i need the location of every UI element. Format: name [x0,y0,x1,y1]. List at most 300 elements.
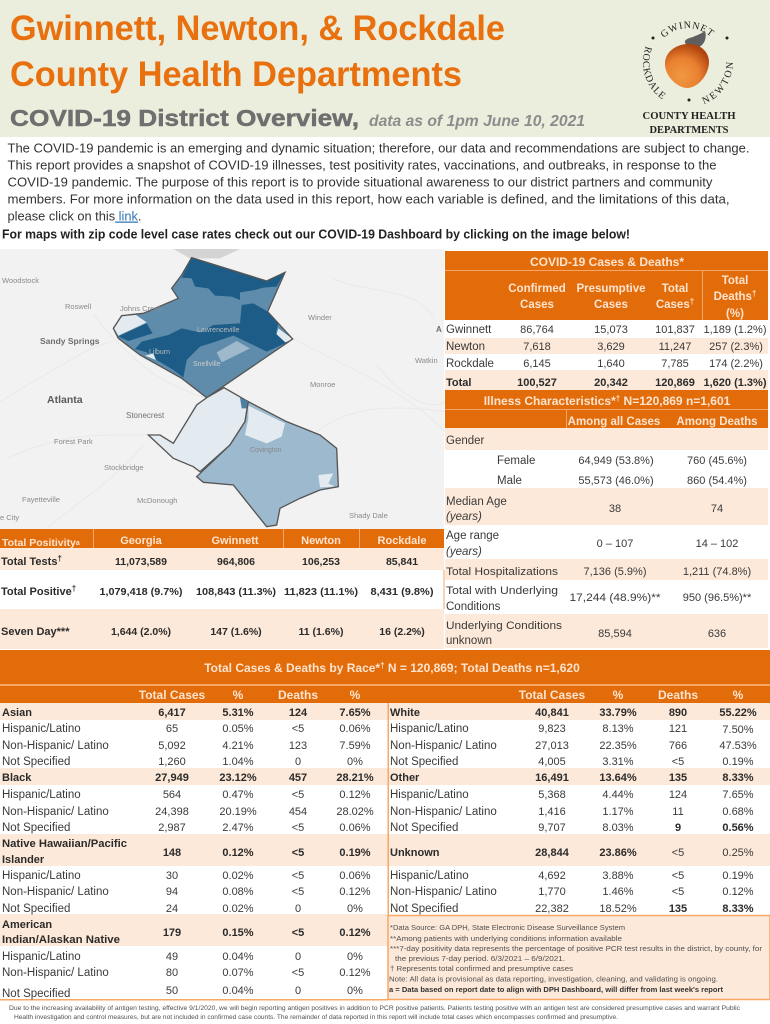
row: hospitalizations: 1,211 (74.8%) [683,566,751,578]
Native Hawaiian/Pacific Islander rows: <5 [292,847,304,859]
Black rows: Non-Hispanic/ Latino [2,806,109,818]
Black rows: Not Specified [2,822,70,834]
Unknown rows: 4,692 [538,870,566,882]
American Indian/Alaskan Native rows: Hispanic/Latino [2,951,81,963]
Native Hawaiian/Pacific Islander rows: Non-Hispanic/ Latino [2,886,109,898]
row: age range: (years) [446,546,482,558]
Other rows: Other [390,772,420,784]
introduction text [8,142,750,224]
Other rows: 0.68% [722,806,754,818]
Native Hawaiian/Pacific Islander rows: 94 [166,886,178,898]
row: seven day: 147 (1.6%) [210,626,262,638]
row: county total: 20,342 [594,377,628,389]
Black rows: Hispanic/Latino [2,789,81,801]
row: total positive: 1,079,418 (9.7%) [100,587,182,598]
row: seven day: 1,644 (2.0%) [111,626,171,638]
map place labels: A [436,325,442,334]
Newton county choropleth [197,398,338,527]
Unknown rows: 3.88% [602,870,634,882]
Other rows: 9,707 [538,822,566,834]
American Indian/Alaskan Native rows: 0 [295,985,301,997]
footer note: Due to the increasing availability of antigen testing, effective 9/1/2020, we will begin reporting antigen positives in addition to PCR positive patients. Patients testing positive with an antigen test are considered presumptive cases and warrant Public [9,1005,741,1012]
map place labels: Winder [308,313,332,322]
American Indian/Alaskan Native rows: Not Specified [2,988,70,1000]
table: illness characteristics [445,390,768,648]
section banner: cases and deaths by race [0,650,770,686]
row: Gwinnett: Gwinnett [446,324,492,336]
Black rows: 0.47% [222,789,254,801]
county column headers: Deaths [714,291,752,303]
White rows: Hispanic/Latino [390,723,469,735]
icon: county health logo [642,22,736,136]
row: conditions unknown: Underlying Conditions [446,620,563,632]
panel: footnotes: **Among patients with underlying conditions information available [390,934,622,943]
row: county total: 1,620 (1.3%) [704,377,767,389]
left column headers: Total Cases [139,688,206,702]
right column headers: Total Cases [519,688,586,702]
Black rows [2,772,374,834]
Unknown rows: 18.52% [599,903,637,915]
introduction text: please click on this link. [8,210,142,224]
row: seven day: Seven Day*** [1,626,70,638]
Other rows [390,772,754,834]
Native Hawaiian/Pacific Islander rows: Islander [2,854,45,866]
Other rows: 16,491 [535,772,569,784]
Unknown rows: Unknown [390,847,440,859]
row: county total: Total [446,377,471,389]
county column headers: Cases [520,299,554,311]
row: seven day [1,626,425,638]
Native Hawaiian/Pacific Islander rows: 30 [166,870,178,882]
Black rows: 2,987 [158,822,186,834]
Asian rows: 0.05% [222,723,254,735]
Unknown rows: <5 [672,847,684,859]
White rows: 3.31% [602,756,634,768]
American Indian/Alaskan Native rows: 0 [295,951,301,963]
row: age range: 14 – 102 [696,538,738,550]
Asian rows: 1,260 [158,756,186,768]
Unknown rows: 0.12% [722,886,754,898]
American Indian/Alaskan Native rows: 0% [347,951,363,963]
row: total positive: 11,823 (11.1%) [284,587,358,598]
Other rows: 4.44% [602,789,634,801]
row: total tests: 964,806 [217,556,255,568]
White rows: 0.19% [722,756,754,768]
illness column headers [568,416,758,428]
table: race breakdown, right [388,686,770,1000]
Other rows: Hispanic/Latino [390,789,469,801]
Unknown rows: 8.33% [722,903,754,915]
Native Hawaiian/Pacific Islander rows: 0.12% [222,847,254,859]
White rows: 7.50% [722,724,754,736]
American Indian/Alaskan Native rows: Indian/Alaskan Native [2,934,120,946]
row: gender: Gender [446,435,485,447]
row: total tests: Total Tests [1,556,57,568]
Unknown rows: <5 [672,886,684,898]
Unknown rows: 1.46% [602,886,634,898]
row: male [497,475,747,487]
row: Newton: 3,629 [597,341,625,353]
row: male: 55,573 (46.0%) [578,475,654,487]
American Indian/Alaskan Native rows [2,919,371,1000]
section banner: cases and deaths by race: N = 120,869; Total Deaths n=1,620 [385,661,580,675]
Unknown rows: 0.25% [722,847,754,859]
Native Hawaiian/Pacific Islander rows: <5 [292,870,304,882]
county column headers: † [752,289,756,298]
section banner: cases and deaths by race: † [380,661,385,670]
Unknown rows: 1,770 [538,886,566,898]
row: median age [446,496,723,523]
American Indian/Alaskan Native rows: 49 [166,951,178,963]
table: total positivity [0,529,444,649]
map place labels: Monroe [310,380,335,389]
row: total positive: † [72,584,76,593]
Black rows: 28.02% [336,806,374,818]
map place labels [0,276,442,522]
county column headers [508,275,756,320]
row: female: 760 (45.6%) [687,455,747,467]
map place labels: Forest Park [54,437,93,446]
row: hospitalizations: 7,136 (5.9%) [584,566,646,578]
Other rows: 124 [669,789,687,801]
data date: data as of 1pm June 10, 2021 [369,113,585,130]
row: median age: 74 [711,503,723,515]
row: underlying conditions: Total with Underlying [446,585,558,597]
Unknown rows [390,847,754,915]
White rows: <5 [672,756,684,768]
Unknown rows: Hispanic/Latino [390,870,469,882]
introduction text: members. For more information on the data used in this report, how each variable is defined, and the limitations of this data, [8,192,730,206]
Black rows: <5 [292,822,304,834]
American Indian/Alaskan Native rows: 179 [163,927,181,939]
Native Hawaiian/Pacific Islander rows: Hispanic/Latino [2,870,81,882]
row: county total: 100,527 [517,377,557,389]
map place labels: Lawrenceville [197,327,240,334]
row: total tests: 106,253 [302,556,340,568]
left column headers: % [350,688,361,702]
Asian rows: 123 [289,740,307,752]
right column headers [519,688,744,702]
White rows: 22.35% [599,740,637,752]
row: total positive: Total Positive [1,586,72,598]
table: race breakdown, left [0,686,388,1000]
Asian rows: 1.04% [222,756,254,768]
White rows: 9,823 [538,723,566,735]
map place labels: Fayetteville [22,495,60,504]
row: underlying conditions: 17,244 (48.9%)** [570,592,661,604]
row: Newton: 11,247 [659,341,691,353]
Native Hawaiian/Pacific Islander rows: <5 [292,886,304,898]
Other rows: 1.17% [602,806,634,818]
left column headers: % [233,688,244,702]
row: male: Male [497,475,522,487]
Native Hawaiian/Pacific Islander rows: 0.08% [222,886,254,898]
panel: footnotes: † Represents total confirmed and presumptive cases [390,964,573,973]
row: median age: 38 [609,503,621,515]
Native Hawaiian/Pacific Islander rows [2,838,371,915]
row: Gwinnett: 86,764 [520,324,554,336]
row: total tests: † [57,554,62,563]
Unknown rows: <5 [672,870,684,882]
White rows: 33.79% [599,707,637,719]
map place labels: Atlanta [47,394,83,406]
Other rows: 9 [675,822,681,834]
row: Rockdale: 7,785 [661,358,689,370]
row: total tests: 11,073,589 [115,556,167,568]
map place labels: McDonough [137,496,177,505]
row: Newton: Newton [446,341,485,353]
county column headers: Presumptive [576,283,646,295]
row: female: 64,949 (53.8%) [578,455,654,467]
county column headers: Confirmed [508,283,566,295]
Black rows: 20.19% [219,806,257,818]
icon: county health logo: DEPARTMENTS [650,125,729,136]
row: Newton: 257 (2.3%) [709,341,763,353]
Unknown rows: Not Specified [390,903,458,915]
American Indian/Alaskan Native rows: 50 [166,985,178,997]
Black rows: 454 [289,806,307,818]
Other rows: Not Specified [390,822,458,834]
icon: county health logo: ROCKDALE [642,46,666,100]
row: seven day: 16 (2.2%) [379,626,425,638]
Rockdale county choropleth [148,388,248,472]
dashboard prompt: For maps with zip code level case rates check out our COVID-19 Dashboard by clicking on the image below! [2,228,630,242]
White rows: Non-Hispanic/ Latino [390,740,497,752]
White rows: 121 [669,723,687,735]
panel: footnotes: *Data Source: GA DPH, State Electronic Disease Surveillance System [390,923,625,932]
Asian rows: 65 [166,723,178,735]
county column headers: Total [722,275,748,287]
American Indian/Alaskan Native rows: 0.07% [222,967,254,979]
American Indian/Alaskan Native rows: American [2,919,52,931]
White rows: 4,005 [538,756,566,768]
Native Hawaiian/Pacific Islander rows: 0.12% [339,886,371,898]
county column headers: Cases [594,299,628,311]
Asian rows: 7.59% [339,740,371,752]
introduction text: This report provides a snapshot of COVID-19 illnesses, test positivity rates, vaccinations, and outbreaks, in response to the [8,158,717,172]
Asian rows: Hispanic/Latino [2,723,81,735]
White rows: 27,013 [535,740,569,752]
map: district case rates [0,249,445,529]
American Indian/Alaskan Native rows: 0.15% [222,927,254,939]
row: county total [446,377,767,389]
right column headers: % [613,688,624,702]
Asian rows: 4.21% [222,740,254,752]
Asian rows: 0% [347,756,363,768]
Black rows: 23.12% [219,772,257,784]
row: underlying conditions: 950 (96.5%)** [683,592,752,604]
positivity header row [2,535,426,549]
row: Rockdale: 6,145 [523,358,551,370]
Native Hawaiian/Pacific Islander rows: 0 [295,903,301,915]
Asian rows: 0 [295,756,301,768]
Asian rows: Asian [2,707,32,719]
positivity header row: Georgia [120,535,163,547]
American Indian/Alaskan Native rows: 0.04% [222,951,254,963]
row: Gwinnett: 101,837 [655,324,695,336]
row: Gwinnett: 1,189 (1.2%) [704,324,766,336]
Asian rows: 0.06% [339,723,371,735]
White rows: 890 [669,707,687,719]
footer note [9,1005,741,1021]
Native Hawaiian/Pacific Islander rows: Native Hawaiian/Pacific [2,838,127,850]
right column headers: Deaths [658,688,698,702]
county table heading: COVID-19 Cases & Deaths* [530,255,684,269]
illness heading: † [616,394,620,403]
row: underlying conditions: Conditions [446,601,501,613]
Asian rows [2,707,371,768]
Other rows: 1,416 [538,806,566,818]
illness heading: N=120,869 n=1,601 [620,394,731,408]
row: age range: Age range [446,530,499,542]
row: Rockdale: 1,640 [597,358,625,370]
map place labels: Lilburn [149,349,170,356]
title: County Health Departments [10,55,462,94]
title: Gwinnett, Newton, & Rockdale [10,9,505,48]
Unknown rows: 22,382 [535,903,569,915]
row: Gwinnett [446,324,766,336]
row: conditions unknown [446,620,726,647]
White rows: Not Specified [390,756,458,768]
White rows: 766 [669,740,687,752]
Other rows: 0.56% [722,822,754,834]
row: age range [446,530,738,558]
county column headers: † [690,297,694,306]
map place labels: Shady Dale [349,511,388,520]
county column headers: Total [662,283,688,295]
Other rows: 7.65% [722,789,754,801]
Other rows: 5,368 [538,789,566,801]
American Indian/Alaskan Native rows: <5 [292,927,304,939]
row: hospitalizations: Total Hospitalizations [446,566,559,578]
Native Hawaiian/Pacific Islander rows: 0.02% [222,903,254,915]
row: conditions unknown: unknown [446,635,492,647]
left column headers [139,688,361,702]
Black rows: 24,398 [155,806,189,818]
Asian rows: <5 [292,723,304,735]
row: median age: Median Age [446,496,507,508]
Unknown rows: 23.86% [599,847,637,859]
American Indian/Alaskan Native rows: 0.12% [339,967,371,979]
row: Rockdale: Rockdale [446,358,494,370]
Other rows: 8.03% [602,822,634,834]
panel: footnotes: ***7-day positivity data represents the percentage of positive PCR test results in the district, by county, for [390,944,762,953]
positivity header row: Gwinnett [211,535,259,547]
row: total positive: 8,431 (9.8%) [370,587,434,598]
illness heading: Illness Characteristics* [484,394,616,408]
Asian rows: 124 [289,707,308,719]
Black rows: 0.06% [339,822,371,834]
Native Hawaiian/Pacific Islander rows: 0.19% [339,847,371,859]
American Indian/Alaskan Native rows: 80 [166,967,178,979]
Asian rows: Not Specified [2,756,70,768]
Asian rows: Non-Hispanic/ Latino [2,740,109,752]
Native Hawaiian/Pacific Islander rows: 0% [347,903,363,915]
American Indian/Alaskan Native rows: 0.04% [222,985,254,997]
American Indian/Alaskan Native rows: 0% [347,985,363,997]
row: total tests: 85,841 [386,556,418,568]
row: Rockdale [446,358,763,370]
title [10,9,505,94]
row: seven day: 11 (1.6%) [299,626,343,638]
row: conditions unknown: 636 [708,628,726,640]
positivity header row: Rockdale [378,535,426,547]
row: Newton [446,341,763,353]
row: underlying conditions [446,585,752,613]
Native Hawaiian/Pacific Islander rows: 0.02% [222,870,254,882]
row: male: 860 (54.4%) [687,475,747,487]
Unknown rows: Non-Hispanic/ Latino [390,886,497,898]
introduction text: The COVID-19 pandemic is an emerging and dynamic situation; therefore, our data and recommendations are subject to change. [8,142,750,156]
row: county total: 120,869 [655,377,695,389]
Black rows: 27,949 [155,772,189,784]
panel: footnotes: the previous 7-day period. 6/3/2021 – 6/9/2021. [395,954,565,963]
White rows: White [390,707,420,719]
Native Hawaiian/Pacific Islander rows: 0.06% [339,870,371,882]
row: total positive [1,584,434,598]
table: cases and deaths by county [445,251,768,390]
map place labels: Woodstock [2,276,39,285]
Gwinnett county choropleth [113,258,293,398]
left column headers: Deaths [278,688,318,702]
panel: footnotes [388,916,770,1000]
row: age range: 0 – 107 [597,538,633,550]
row: Newton: 7,618 [523,341,551,353]
row: female [497,455,747,467]
American Indian/Alaskan Native rows: <5 [292,967,304,979]
positivity header row: Total Positivity [2,537,76,549]
Other rows: 135 [669,772,687,784]
White rows: 40,841 [535,707,569,719]
Other rows: 11 [672,806,684,818]
Black rows: 564 [163,789,181,801]
row: median age: (years) [446,511,482,523]
map place labels: Roswell [65,302,92,311]
Unknown rows: 28,844 [535,847,570,859]
Asian rows: 5,092 [158,740,186,752]
Asian rows: 7.65% [339,707,371,719]
Black rows: 0.12% [339,789,371,801]
map place labels: Johns Creek [120,304,162,313]
Black rows: 457 [289,772,307,784]
Native Hawaiian/Pacific Islander rows: Not Specified [2,903,70,915]
panel: footnotes: Note: All data is provisional as data reporting, investigation, cleaning, and validating is ongoing. [389,974,718,984]
map place labels: Covington [250,447,282,454]
White rows: 47.53% [719,740,757,752]
county column headers: (%) [726,308,744,320]
row: Rockdale: 174 (2.2%) [709,358,763,370]
row: female: Female [497,455,535,467]
map place labels: Watkin [415,356,438,365]
Other rows: 13.64% [599,772,637,784]
row: total tests [1,554,418,568]
positivity header row: a [76,540,80,547]
Asian rows: 5.31% [222,707,254,719]
panel: footnotes: a = Data based on report date to align with DPH Dashboard, will differ from last week's report [389,985,723,994]
map place labels: Stonecrest [126,411,165,420]
Black rows: 28.21% [336,772,374,784]
row: total positive: 108,843 (11.3%) [196,587,276,598]
Other rows: Non-Hispanic/ Latino [390,806,497,818]
subtitle: COVID-19 District Overview, [10,105,359,131]
header banner [0,0,770,137]
footer note: Health investigation and control measures, but are not included in confirmed case counts. The remainder of data reported in this report will include total cases which encompasses confirmed and presumptive. [14,1014,618,1021]
section banner: cases and deaths by race: Total Cases & Deaths by Race* [204,661,380,675]
row: hospitalizations [446,566,751,578]
county column headers: Cases [656,299,690,311]
Black rows: <5 [292,789,304,801]
White rows: 8.13% [602,723,634,735]
